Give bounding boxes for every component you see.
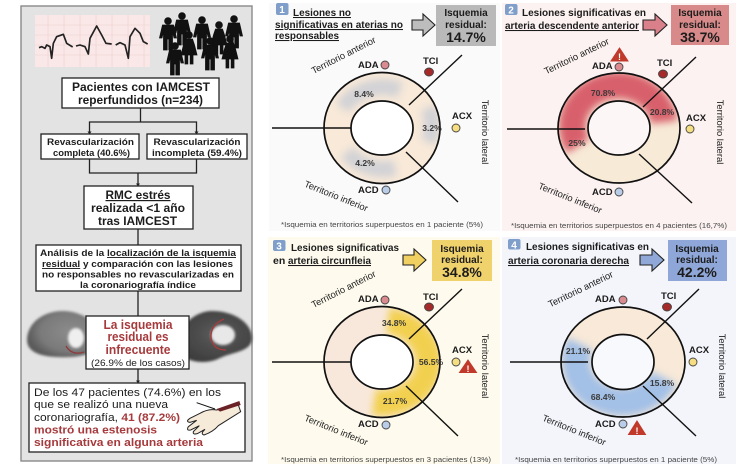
panel 1: non-significant lesions — [269, 3, 500, 231]
donut chart: 20.8% — [650, 107, 675, 117]
artery labels: ACD — [592, 187, 613, 198]
connector: CMR to analysis — [137, 229, 139, 245]
box: complete revascularization — [41, 134, 139, 159]
artery labels: ACX — [452, 345, 473, 356]
box: coronary angiography result — [29, 383, 245, 452]
artery labels: TCI — [423, 56, 438, 67]
box: complete revascularization: Revascularización — [47, 137, 134, 147]
icon: warning: ! — [466, 364, 470, 374]
box: analysis — [36, 245, 241, 291]
box: stress CMR: RMC estrés — [106, 188, 171, 202]
heading: arteria coronaria derecha — [508, 255, 629, 267]
residual ischemia box: residual: — [679, 20, 721, 31]
donut chart: 34.8% — [382, 318, 407, 328]
donut chart: 70.8% — [591, 88, 616, 98]
territory labels — [541, 268, 728, 448]
box: patients: reperfundidos (n=234) — [78, 95, 203, 107]
badge 1: 1 — [279, 5, 285, 16]
box: complete revascularization: completa (40.6%) — [53, 148, 130, 158]
badge 3: 3 — [276, 242, 282, 252]
connector: patients to revascularization — [88, 108, 198, 134]
ECG strip — [35, 15, 150, 67]
territory labels: Territorio anterior — [309, 268, 377, 310]
heading — [505, 7, 646, 32]
connector: revascularization to CMR — [90, 159, 196, 186]
footnote: *Isquemia en territorios superpuestos en 3 pacientes (13%) — [281, 455, 491, 464]
residual ischemia box — [432, 240, 492, 281]
icon: warning: ! — [618, 52, 621, 62]
residual ischemia box: residual: — [676, 255, 718, 266]
box: analysis: residual y comparación con las lesiones — [42, 259, 233, 269]
box: coronary angiography result: mostró una estenosis — [34, 424, 157, 436]
box: patients — [62, 78, 219, 108]
footnote: *Isquemia en territorios superpuestos en 1 paciente (5%) — [515, 455, 717, 464]
box: stress CMR — [84, 186, 193, 229]
donut chart: 21.1% — [566, 346, 591, 356]
footnote: *Isquemia en territorios superpuestos en 4 pacientes (16,7%) — [511, 221, 727, 230]
artery labels — [592, 58, 707, 198]
box: coronary angiography result: coronariografía, 41 (87.2%) — [34, 412, 180, 424]
box: analysis: la coronariografía índice — [80, 280, 196, 290]
heading: Lesiones no — [293, 7, 351, 19]
icon: warning — [628, 421, 646, 436]
donut chart — [272, 55, 462, 202]
residual ischemia box: residual: — [445, 20, 487, 31]
box: coronary angiography result: De los 47 pacientes (74.6%) en los — [34, 387, 221, 399]
heading — [273, 242, 399, 267]
box: key finding: residual es — [108, 330, 169, 344]
territory labels — [537, 35, 726, 216]
icon: group of patients — [160, 13, 242, 75]
box: incomplete revascularization — [147, 134, 247, 159]
territory labels: Territorio inferior — [303, 412, 370, 448]
arrow — [640, 249, 664, 271]
box: analysis: Análisis de la localización de la isquemia — [40, 248, 237, 258]
artery labels: ACX — [452, 111, 473, 122]
icon: hand with radial catheter — [187, 401, 241, 435]
residual ischemia box: Isquemia — [444, 8, 488, 19]
residual ischemia box — [668, 240, 727, 281]
residual ischemia box: Isquemia — [675, 244, 719, 255]
heading: Lesiones significativas en — [522, 7, 646, 19]
box: coronary angiography result: que se realizó una nueva — [34, 399, 169, 411]
donut chart: 25% — [568, 138, 586, 148]
territory labels: Territorio inferior — [541, 412, 608, 448]
residual ischemia box: 42.2% — [677, 264, 717, 280]
image: right cardiac MRI — [177, 311, 252, 362]
artery labels: ADA — [358, 294, 379, 305]
residual ischemia box: residual: — [441, 255, 483, 266]
artery labels: ADA — [592, 61, 613, 72]
connector: analysis to finding — [136, 291, 140, 384]
icon: warning: ! — [636, 426, 638, 436]
box: key finding: La isquemia — [104, 318, 173, 332]
territory labels: Territorio lateral — [717, 334, 728, 398]
icon: warning — [460, 360, 476, 374]
donut chart — [272, 289, 462, 436]
donut chart: 21.7% — [383, 396, 408, 406]
panel 2: left anterior descending — [502, 3, 736, 231]
artery labels: ACD — [595, 419, 616, 430]
territory labels: Territorio lateral — [480, 100, 491, 164]
panel: patient flow summary — [21, 6, 252, 461]
territory labels: Territorio anterior — [309, 34, 377, 76]
footnote: *Isquemia en territorios superpuestos en 1 paciente (5%) — [281, 220, 483, 229]
badge 2 — [505, 4, 518, 16]
box: stress CMR: tras IAMCEST — [98, 214, 178, 228]
residual ischemia box: 34.8% — [442, 264, 482, 280]
image: left cardiac MRI — [27, 311, 100, 357]
badge 4 — [508, 239, 520, 252]
residual ischemia box: Isquemia — [440, 244, 484, 255]
residual ischemia box: 38.7% — [680, 29, 720, 45]
panel 3: circumflex artery — [268, 237, 500, 464]
arrow — [412, 14, 435, 36]
artery labels: ACX — [689, 345, 710, 356]
panel 4: right coronary artery — [502, 237, 736, 464]
residual ischemia box: Isquemia — [678, 8, 722, 19]
box: incomplete revascularization: incompleta (59.4%) — [152, 148, 242, 158]
box: patients: Pacientes con IAMCEST — [72, 82, 210, 94]
arrow — [403, 249, 426, 271]
heading: Lesiones significativas — [291, 242, 399, 254]
territory labels — [303, 268, 491, 448]
residual ischemia box — [436, 5, 496, 46]
donut chart — [507, 57, 696, 203]
icon: warning — [611, 48, 628, 62]
box: key finding: infrecuente — [106, 343, 171, 357]
artery labels — [595, 291, 710, 430]
heading: arteria descendente anterior — [505, 20, 639, 32]
heading: Lesiones significativas en — [526, 241, 649, 253]
artery labels: TCI — [423, 292, 438, 303]
territory labels: Territorio anterior — [546, 268, 615, 309]
artery labels: ADA — [595, 294, 616, 305]
donut chart: 4.2% — [355, 158, 375, 168]
artery labels: ACD — [358, 419, 379, 430]
box: stress CMR: realizada <1 año — [91, 201, 185, 215]
territory labels: Territorio lateral — [715, 100, 726, 164]
territory labels: Territorio anterior — [542, 35, 611, 76]
residual ischemia box: 14.7% — [446, 29, 486, 45]
heading: en — [273, 255, 285, 267]
badge 4: 4 — [511, 240, 517, 252]
badge 2: 2 — [508, 6, 514, 16]
arrow — [643, 14, 667, 36]
box: key finding — [86, 316, 189, 369]
box: incomplete revascularization: Revascularización — [154, 137, 241, 147]
box: key finding: (26.9% de los casos) — [91, 358, 185, 369]
artery labels: ADA — [358, 60, 379, 71]
heading — [508, 241, 649, 267]
artery labels: TCI — [657, 58, 672, 69]
badge 1 — [276, 3, 288, 16]
territory labels: Territorio inferior — [303, 178, 370, 214]
donut chart: 56.5% — [419, 357, 444, 367]
territory labels: Territorio inferior — [537, 180, 604, 216]
donut chart: 3.2% — [422, 123, 442, 133]
artery labels — [358, 292, 473, 430]
donut chart: 15.8% — [650, 378, 675, 388]
territory labels — [303, 34, 491, 214]
artery labels: TCI — [661, 291, 676, 302]
residual ischemia box — [671, 5, 729, 45]
territory labels: Territorio lateral — [480, 334, 491, 398]
box: coronary angiography result: significativa en alguna arteria — [34, 437, 204, 449]
artery labels: ACX — [686, 113, 707, 124]
donut chart: 68.4% — [591, 392, 616, 402]
artery labels: ACD — [358, 185, 379, 196]
heading: responsables — [275, 30, 339, 42]
heading — [275, 7, 403, 42]
heading: arteria circunfleia — [288, 255, 371, 267]
donut chart: 8.4% — [354, 89, 374, 99]
badge 3 — [273, 240, 286, 252]
donut chart — [510, 289, 699, 436]
heading: significativas en aterias no — [275, 19, 403, 31]
artery labels — [358, 56, 473, 196]
box: analysis: no responsables no revascularizadas en — [42, 270, 234, 280]
